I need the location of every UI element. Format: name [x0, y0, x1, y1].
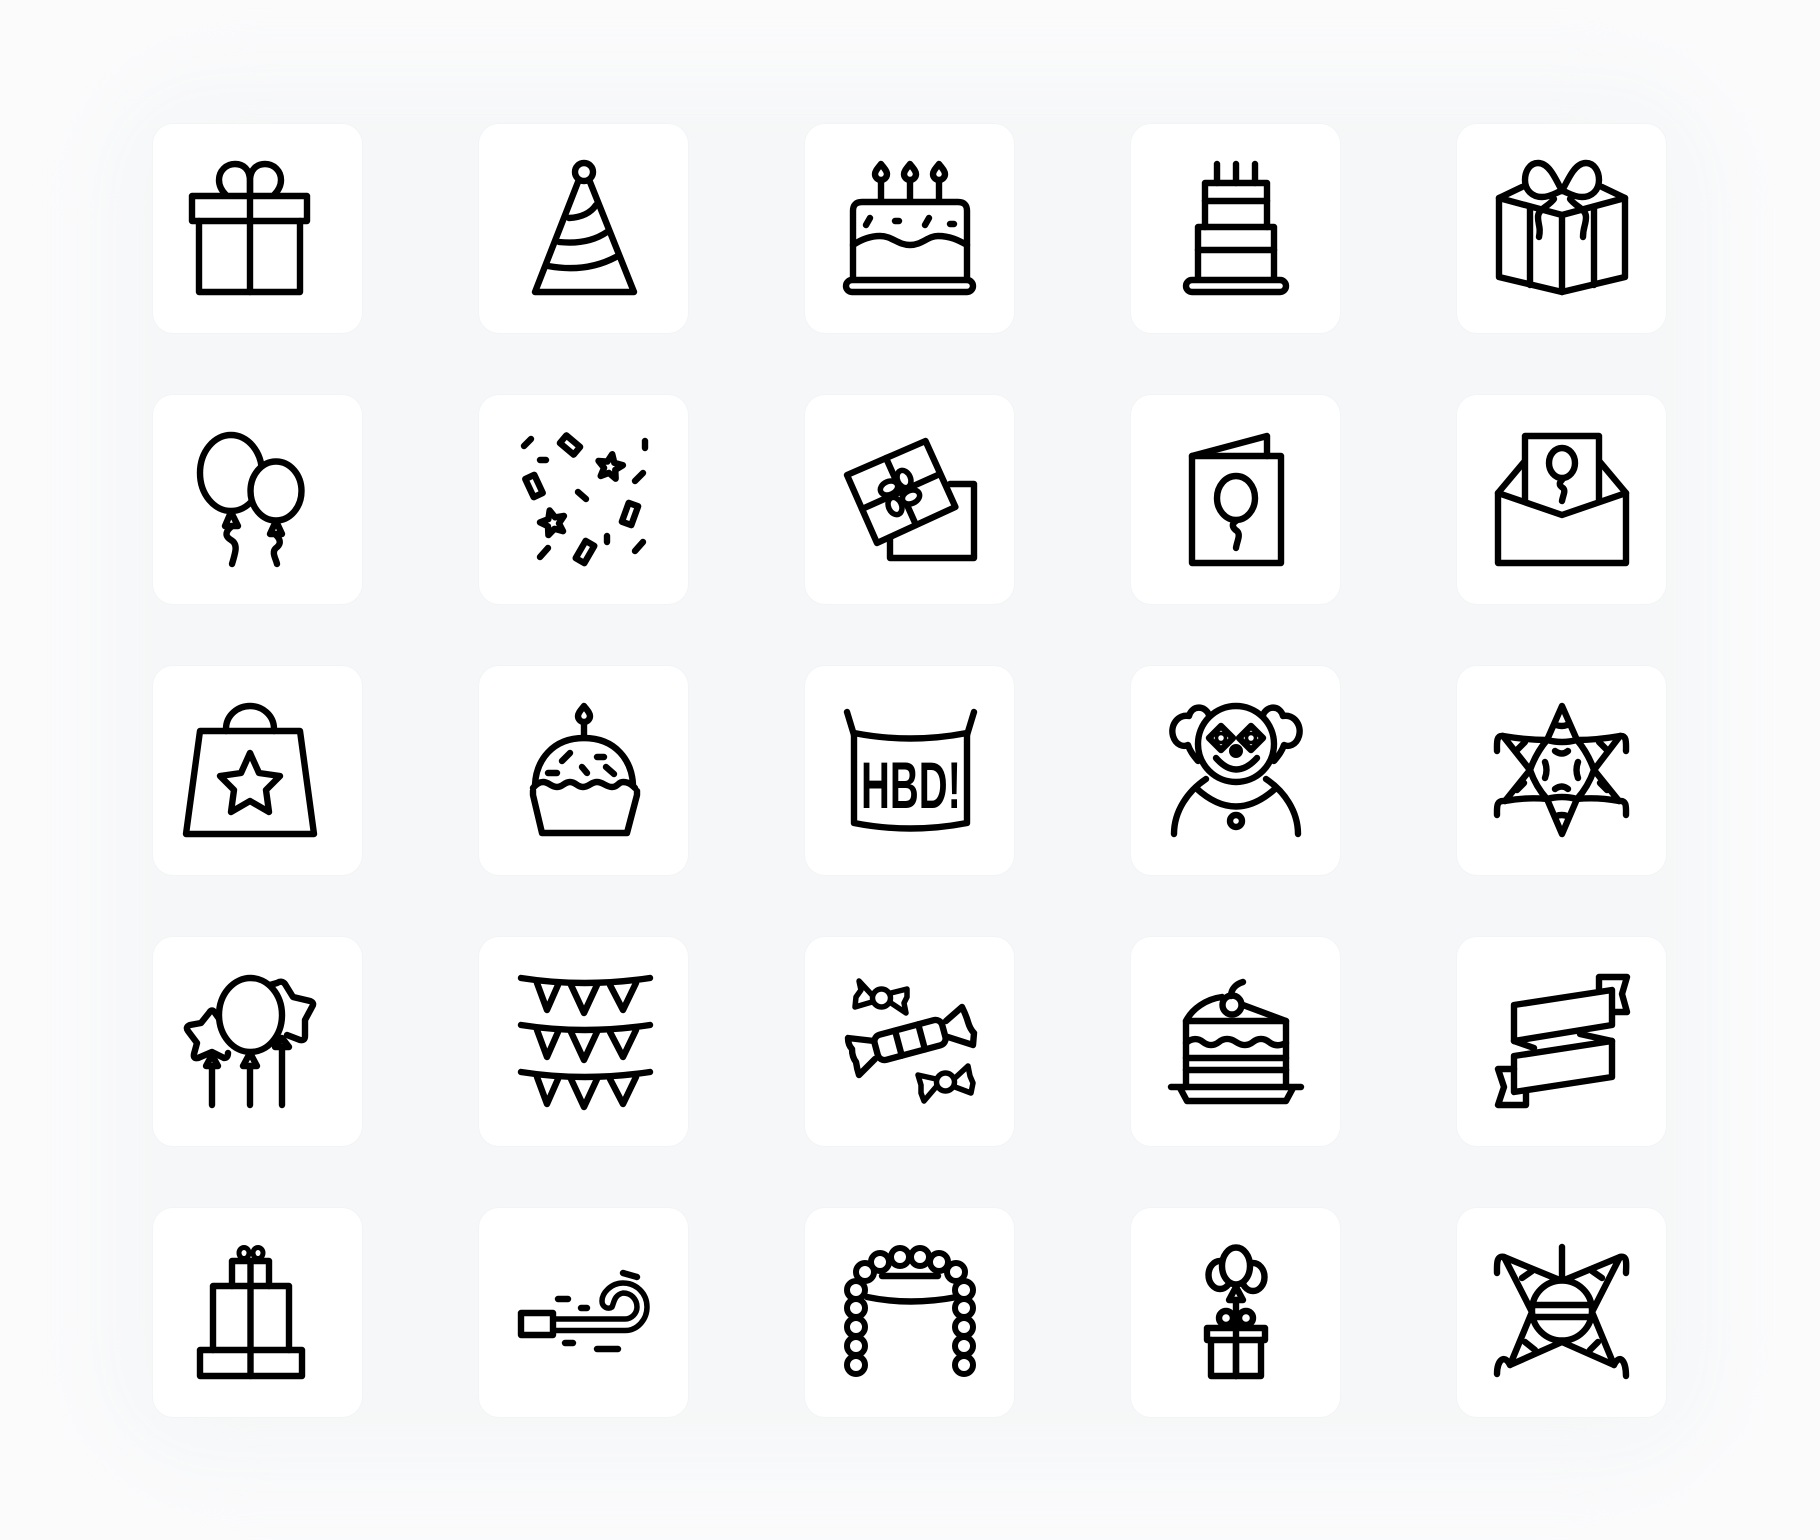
- icon: ribbon banner: [1494, 974, 1630, 1108]
- panel: wrapped present: [1457, 124, 1666, 333]
- panel: gift with balloons: [1131, 1208, 1340, 1417]
- panel: birthday cake: [805, 124, 1014, 333]
- text: HBD!: HBD!: [860, 748, 960, 822]
- panel: envelope invitation: [1457, 395, 1666, 604]
- icon: gift with balloons: [1204, 1244, 1268, 1380]
- panel: open gift box: [805, 395, 1014, 604]
- icon: HBD banner: [844, 708, 978, 832]
- panel: gift box: [153, 124, 362, 333]
- panel: confetti: [479, 395, 688, 604]
- icon: cupcake: [530, 702, 640, 836]
- panel: cake slice: [1131, 937, 1340, 1146]
- panel: clown: [1131, 666, 1340, 875]
- icon: envelope invitation: [1494, 432, 1630, 566]
- icon: two balloons: [196, 432, 305, 568]
- icon: star pinata: [1494, 702, 1630, 838]
- icon: open gift box: [844, 438, 978, 562]
- panel: hanging pinata: [1457, 1208, 1666, 1417]
- panel: stacked gifts: [153, 1208, 362, 1417]
- icon: gift box: [188, 160, 310, 296]
- icon: hanging pinata: [1494, 1244, 1630, 1380]
- panel: party blower: [479, 1208, 688, 1417]
- icon: candies: [844, 978, 978, 1104]
- panel: star balloons: [153, 937, 362, 1146]
- panel: two balloons: [153, 395, 362, 604]
- icon: tiered cake: [1182, 160, 1290, 296]
- icon: greeting card: [1188, 432, 1284, 566]
- icon: confetti: [520, 432, 648, 566]
- panel: bunting: [479, 937, 688, 1146]
- icon: cake slice: [1168, 978, 1304, 1104]
- icon: star balloons: [184, 974, 316, 1108]
- panel: star pinata: [1457, 666, 1666, 875]
- icon: wrapped present: [1496, 160, 1628, 296]
- icon: gift bag: [182, 702, 318, 838]
- icon: bunting: [518, 974, 654, 1110]
- panel: cupcake: [479, 666, 688, 875]
- panel: ribbon banner: [1457, 937, 1666, 1146]
- panel: balloon arch: [805, 1208, 1014, 1417]
- panel: party hat: [479, 124, 688, 333]
- icon: birthday cake: [842, 160, 976, 296]
- panel: HBD banner: [805, 666, 1014, 875]
- panel: candies: [805, 937, 1014, 1146]
- panel: greeting card: [1131, 395, 1340, 604]
- icon: stacked gifts: [196, 1245, 306, 1380]
- icon: balloon arch: [844, 1245, 976, 1377]
- icon: party blower: [518, 1270, 650, 1352]
- panel: gift bag: [153, 666, 362, 875]
- panel: tiered cake: [1131, 124, 1340, 333]
- icon: party hat: [532, 160, 638, 296]
- icon: clown: [1169, 702, 1303, 838]
